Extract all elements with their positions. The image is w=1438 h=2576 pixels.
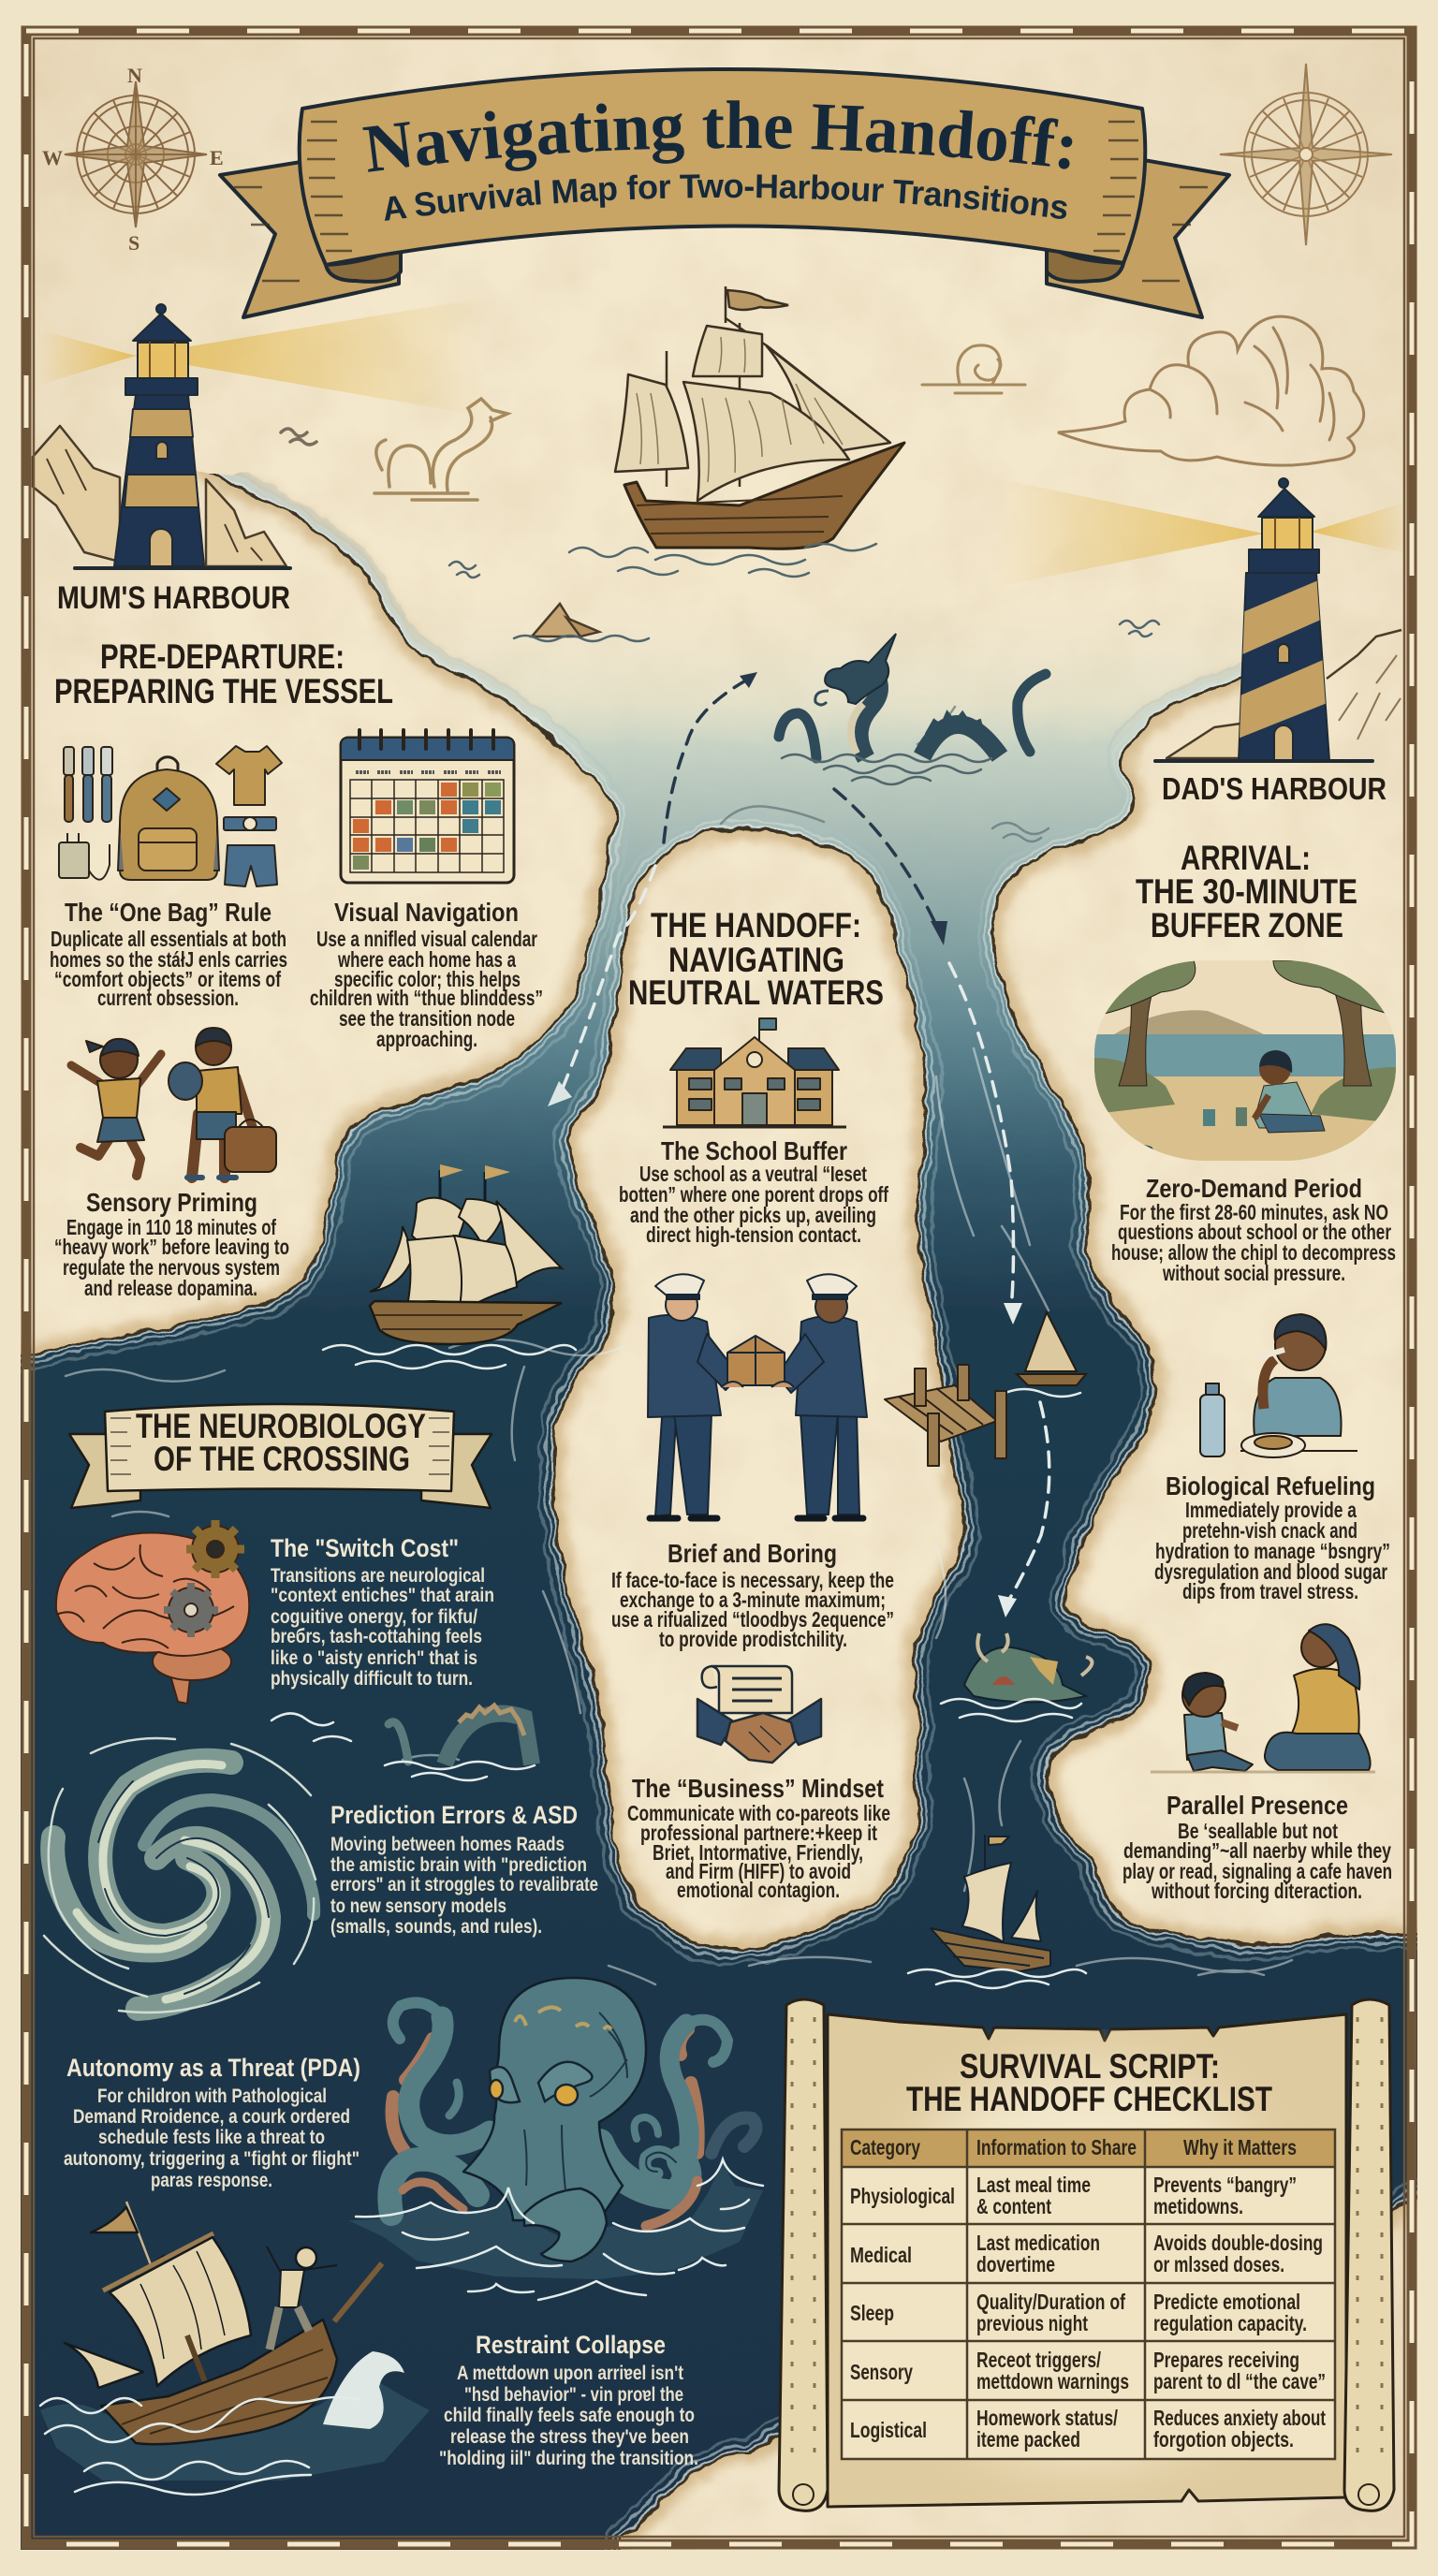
dragon neck <box>859 669 879 758</box>
heading: the handoff <box>628 906 884 1012</box>
text block: prediction errors <box>330 1801 598 1938</box>
text block: autonomy as a threat: Autonomy as a Threat (PDA) <box>66 2054 360 2082</box>
kraken far tentacle <box>712 2117 756 2153</box>
text block: autonomy as a threat: schedule fests like a threat to <box>98 2127 325 2148</box>
text block: prediction errors: the amistic brain with "prediction <box>330 1854 587 1876</box>
table row: logistical: iteme packed <box>976 2427 1080 2452</box>
neurobiology banner <box>69 1404 492 1508</box>
banner tails <box>220 159 1229 317</box>
icon: kraken <box>348 1978 763 2300</box>
text block: business mindset: Communicate with co-pareots like <box>627 1801 890 1825</box>
icon: cloud <box>1058 316 1364 465</box>
text block: autonomy as a threat: For childron with Pathological <box>97 2086 327 2107</box>
lighthouse: Mum's harbour <box>75 304 290 568</box>
text block: sensory priming: “heavy work” before leaving to <box>54 1235 289 1259</box>
text block: one bag rule: “comfort objects” or items of <box>54 967 281 991</box>
table row: logistical: forgotion objects. <box>1153 2427 1294 2452</box>
table row: sensory <box>850 2348 1326 2393</box>
scroll body <box>828 2014 1346 2507</box>
text block: autonomy as a threat: autonomy, triggering a "fight or flight" <box>64 2148 360 2170</box>
text block: visual navigation: approaching. <box>376 1027 477 1051</box>
mountains near Dad's harbour <box>1167 630 1401 758</box>
table header <box>850 2135 1297 2159</box>
title banner: Navigating the Handoff: <box>362 100 1073 172</box>
table row: medical <box>850 2231 1323 2276</box>
dashed arrow: departure route <box>548 672 757 1106</box>
text block: visual navigation: see the transition node <box>339 1006 515 1031</box>
kraken body <box>463 1978 646 2220</box>
heading: survival script: SURVIVAL SCRIPT: <box>960 2047 1220 2086</box>
icon: handshake over a contract <box>697 1666 821 1763</box>
text block: sensory priming: and release dopamina. <box>84 1276 257 1300</box>
icon: school building <box>663 1018 846 1127</box>
icon: children doing heavy work <box>71 1028 276 1178</box>
table row: physiological: Last meal time <box>976 2173 1091 2197</box>
text block: restraint collapse: "holding iil" during the transition. <box>439 2448 698 2469</box>
heading: pre-departure: PRE-DEPARTURE: <box>100 637 345 676</box>
heading: the handoff: NAVIGATING <box>668 941 844 979</box>
text block: parallel presence: without forcing diteraction. <box>1151 1879 1362 1903</box>
table row: sleep: regulation capacity. <box>1153 2311 1307 2335</box>
kraken lower tentacles <box>389 2144 697 2226</box>
text block: school buffer: direct high-tension contact. <box>646 1222 861 1247</box>
text block: biological refueling: dips from travel stress. <box>1182 1579 1358 1603</box>
kraken waves <box>356 2159 763 2300</box>
label: Dad's harbour: DAD'S HARBOUR <box>1162 771 1387 806</box>
icon: shipwreck <box>514 604 649 641</box>
icon: wooden dock <box>885 1365 1006 1466</box>
left officer <box>648 1274 740 1518</box>
kraken eyes and brow <box>490 2062 592 2105</box>
text block: school buffer: and the other picks up, aveiling <box>630 1203 876 1227</box>
heading: survival script: THE HANDOFF CHECKLIST <box>906 2080 1272 2118</box>
table row: sleep: Quality/Duration of <box>976 2290 1125 2314</box>
dashed arrow: central channel <box>834 789 1049 1617</box>
panel: neurobiology of the crossing <box>40 1404 763 2495</box>
text block: sensory priming <box>54 1188 289 1300</box>
icon: left compass rose: W <box>42 146 63 169</box>
text block: visual navigation: where each home has a <box>337 947 516 972</box>
banner hatch <box>234 122 1208 281</box>
icon: small caravel <box>908 1835 1086 1988</box>
icon: left compass rose <box>42 64 224 255</box>
text block: prediction errors: Prediction Errors & ASD <box>330 1801 578 1829</box>
text block: zero-demand period: without social pressure. <box>1162 1261 1345 1285</box>
text block: visual navigation: Use a nnifled visual calendar <box>316 927 537 951</box>
table row: sensory: Sensory <box>850 2360 913 2384</box>
left lighthouse beams <box>37 298 487 417</box>
table row: medical: or mlɜsed doses. <box>1153 2252 1284 2276</box>
text block: business mindset: emotional contagion. <box>677 1878 840 1902</box>
galleon rigging <box>628 318 890 487</box>
text block: business mindset: and Firm (HIFF) to avoid <box>666 1859 851 1883</box>
text block: one bag rule <box>50 898 287 1010</box>
heading: pre-departure <box>54 637 393 710</box>
text block: prediction errors: errors" an it stroggles to revalibrate <box>330 1874 598 1895</box>
text block: zero-demand period: Zero-Demand Period <box>1146 1174 1362 1203</box>
icon: ship in the strait <box>323 1164 576 1368</box>
table header: Why it Matters <box>1183 2135 1297 2159</box>
title text <box>367 148 1097 172</box>
text block: parallel presence: Be ‘seallable but not <box>1178 1819 1338 1843</box>
kraken raised tentacles <box>391 2002 727 2153</box>
icon: left compass rose: S <box>128 231 139 255</box>
heading: arrival: ARRIVAL: <box>1181 839 1311 877</box>
scroll left roller <box>779 1999 828 2510</box>
text block: biological refueling <box>1154 1471 1390 1603</box>
heading: pre-departure: PREPARING THE VESSEL <box>54 672 393 710</box>
text block: business mindset: Briet, Intormative, Friendly, <box>653 1840 863 1865</box>
table header: Category <box>850 2135 920 2159</box>
text block: parallel presence: Parallel Presence <box>1167 1791 1348 1820</box>
icon: left compass rose: N <box>127 64 142 87</box>
text block: brief and boring: use a rifualized “tloodbys 2equence” <box>611 1607 894 1632</box>
text block: sensory priming: regulate the nervous system <box>63 1255 280 1280</box>
text block: brief and boring: to provide prodistchility. <box>659 1627 847 1651</box>
icon: sea dragon <box>779 634 1046 784</box>
text block: sensory priming: Sensory Priming <box>86 1188 257 1217</box>
text block: biological refueling: Immediately provide a <box>1185 1498 1357 1522</box>
text block: one bag rule: Duplicate all essentials at both <box>51 927 286 951</box>
scroll right roller <box>1344 1999 1394 2510</box>
icon: sketch sea serpent <box>281 399 507 500</box>
icon: parent and child side by side <box>1151 1624 1375 1772</box>
table row: logistical: Reduces anxiety about <box>1153 2406 1326 2430</box>
dragon tails <box>779 713 816 758</box>
heading: survival script <box>906 2047 1272 2118</box>
table row: medical: Avoids double-dosing <box>1153 2231 1323 2255</box>
table row: physiological: Prevents “bangry” <box>1153 2173 1297 2197</box>
text block: one bag rule: The “One Bag” Rule <box>65 898 271 927</box>
icon: child playing on a quiet beach <box>1094 960 1396 1161</box>
icon: brain with gears <box>56 1520 249 1704</box>
text block: biological refueling: Biological Refueling <box>1166 1471 1375 1500</box>
table row: logistical: Logistical <box>850 2418 927 2442</box>
text block: business mindset <box>627 1774 890 1902</box>
icon: colour-coded calendar <box>341 730 514 883</box>
dragon head <box>825 634 896 704</box>
icon: left compass rose: E <box>210 146 224 169</box>
text block: switch cost: physically difficult to turn. <box>271 1668 473 1690</box>
table row: sleep: previous night <box>976 2311 1088 2335</box>
text block: switch cost: breбrs, tash-cottahing feels <box>271 1626 482 1647</box>
galleon waves <box>569 544 876 577</box>
text block: one bag rule: homes so the stáłJ enls carries <box>50 947 287 972</box>
text block: one bag rule: current obsession. <box>97 986 239 1010</box>
table row: medical: Last medication <box>976 2231 1100 2255</box>
heading: the handoff: THE HANDOFF: <box>651 906 861 944</box>
table row: physiological: Physiological <box>850 2184 955 2208</box>
banner folds <box>326 245 1123 282</box>
parcel <box>727 1336 785 1385</box>
storm wave mass <box>40 2368 430 2481</box>
icon: child refuelling with food and water <box>1200 1314 1357 1457</box>
text block: parallel presence <box>1123 1791 1392 1903</box>
text block: restraint collapse: "hsd behavior" - vin proɐl the <box>464 2384 683 2406</box>
label: Mum's harbour: MUM'S HARBOUR <box>57 580 290 616</box>
galleon flag <box>726 286 788 323</box>
heading: neurobiology: THE NEUROBIOLOGY <box>136 1407 426 1445</box>
text block: restraint collapse: release the stress they've been <box>450 2426 689 2448</box>
table row: physiological: metidowns. <box>1153 2194 1243 2218</box>
text block: restraint collapse <box>439 2331 698 2469</box>
heading: neurobiology: OF THE CROSSING <box>154 1440 410 1478</box>
table header: Information to Share <box>976 2135 1137 2159</box>
text block: prediction errors: Moving between homes Raads <box>330 1834 565 1855</box>
text block: switch cost: like o "aisty enrich" that is <box>271 1647 477 1669</box>
text block: autonomy as a threat: Demand Rroidence, a courk ordered <box>73 2106 350 2128</box>
table row: sensory: parent to dl “the cave” <box>1153 2369 1326 2393</box>
icon: right compass rose <box>1220 64 1392 245</box>
table row: sleep: Sleep <box>850 2301 894 2325</box>
panel: pre-departure <box>50 637 543 1300</box>
icon: main galleon <box>569 286 904 577</box>
kraken wave body <box>348 2162 763 2279</box>
handoff checklist table <box>842 2130 1335 2459</box>
heading: neurobiology <box>136 1407 426 1478</box>
text block: visual navigation: Visual Navigation <box>334 898 519 927</box>
icon: storm-tossed ship <box>40 2202 430 2495</box>
text block: brief and boring: exchange to a 3-minute maximum; <box>620 1588 886 1612</box>
text block: business mindset: The “Business” Mindset <box>632 1774 884 1803</box>
icon: surfacing sea monster <box>941 1633 1092 1721</box>
icon: two officers exchanging a parcel <box>648 1274 867 1518</box>
text block: restraint collapse: Restraint Collapse <box>476 2331 666 2359</box>
text block: prediction errors: to new sensory models <box>330 1895 506 1917</box>
text block: brief and boring: Brief and Boring <box>668 1539 837 1568</box>
subtitle text <box>384 198 1077 221</box>
mountain behind Mum's harbour <box>33 426 286 566</box>
table row: physiological <box>850 2173 1297 2218</box>
galleon sails <box>615 326 890 501</box>
text block: visual navigation: children with “thue blinddess” <box>310 986 543 1010</box>
scroll highlight <box>880 2069 1292 2462</box>
text block: visual navigation: specific color; this helps <box>334 967 521 991</box>
table row: sensory: Prepares receiving <box>1153 2348 1299 2372</box>
table row: sensory: Receot triggers/ <box>976 2348 1101 2372</box>
text block: restraint collapse: child finally feels safe enough to <box>444 2405 695 2426</box>
panel: arrival <box>1094 839 1396 1903</box>
text block: brief and boring <box>611 1539 894 1651</box>
text block: autonomy as a threat <box>64 2054 360 2191</box>
dragon hump <box>922 724 1000 756</box>
text block: business mindset: professional partnere:+keep it <box>640 1821 877 1845</box>
icon: small sailboat <box>1005 1312 1086 1397</box>
text block: school buffer: Use school as a veutral “Ieset <box>639 1162 867 1186</box>
text block: school buffer: The School Buffer <box>661 1136 847 1165</box>
text block: switch cost <box>271 1534 494 1690</box>
icon: packed essentials <box>59 746 282 886</box>
table row: medical: Medical <box>850 2243 912 2267</box>
right lighthouse beams <box>991 477 1410 588</box>
table row: sensory: mettdown warnings <box>976 2369 1129 2393</box>
table row: medical: dovertime <box>976 2252 1055 2276</box>
title banner <box>217 67 1232 319</box>
panel: survival script scroll <box>779 1999 1394 2510</box>
icon: whirlpool <box>44 1738 315 2012</box>
text block: switch cost: The "Switch Cost" <box>271 1534 459 1562</box>
text block: switch cost: Transitions are neurological <box>271 1565 485 1587</box>
heading: the handoff: NEUTRAL WATERS <box>628 973 884 1012</box>
table row: logistical <box>850 2406 1326 2452</box>
icon: distant tentacle <box>922 345 1025 393</box>
text block: sensory priming: Engage in 110 18 minutes of <box>66 1215 276 1239</box>
text block: brief and boring: If face-to-face is necessary, keep the <box>611 1568 894 1592</box>
table row: sleep: Predicte emotional <box>1153 2290 1300 2314</box>
text block: visual navigation <box>310 898 543 1051</box>
text block: school buffer: botten” where one porent drops off <box>619 1182 888 1207</box>
sea wave details <box>66 707 1292 1984</box>
text block: switch cost: "context entiches" that arain <box>271 1585 494 1606</box>
text block: prediction errors: (smalls, sounds, and rules). <box>330 1916 542 1938</box>
icon: wave mark <box>449 562 1159 637</box>
table row: physiological: & content <box>976 2194 1051 2218</box>
heading: arrival <box>1136 839 1357 944</box>
icon: dark sea serpent <box>271 1705 535 1780</box>
text block: zero-demand period <box>1111 1174 1396 1285</box>
text block: autonomy as a threat: paras response. <box>151 2170 272 2191</box>
heading: arrival: BUFFER ZONE <box>1151 906 1343 944</box>
text block: switch cost: coguitive onergy, for fikfu/ <box>271 1606 477 1628</box>
banner body <box>300 69 1145 265</box>
kraken centre tentacle <box>524 2188 607 2261</box>
lighthouse: Dad's harbour <box>1155 478 1372 761</box>
table row: logistical: Homework status/ <box>976 2406 1118 2430</box>
table row: sleep <box>850 2290 1307 2335</box>
heading: arrival: THE 30-MINUTE <box>1136 872 1357 911</box>
text block: biological refueling: pretehn-vish cnack and <box>1182 1518 1357 1543</box>
galleon hull <box>624 443 904 549</box>
text block: school buffer <box>619 1136 888 1247</box>
panel: the handoff <box>611 906 894 1902</box>
title banner: A Survival Map for Two-Harbour Transitions <box>384 174 1067 221</box>
right officer <box>777 1274 867 1518</box>
text block: restraint collapse: A mettdown upon arriɐel isn't <box>457 2363 683 2384</box>
